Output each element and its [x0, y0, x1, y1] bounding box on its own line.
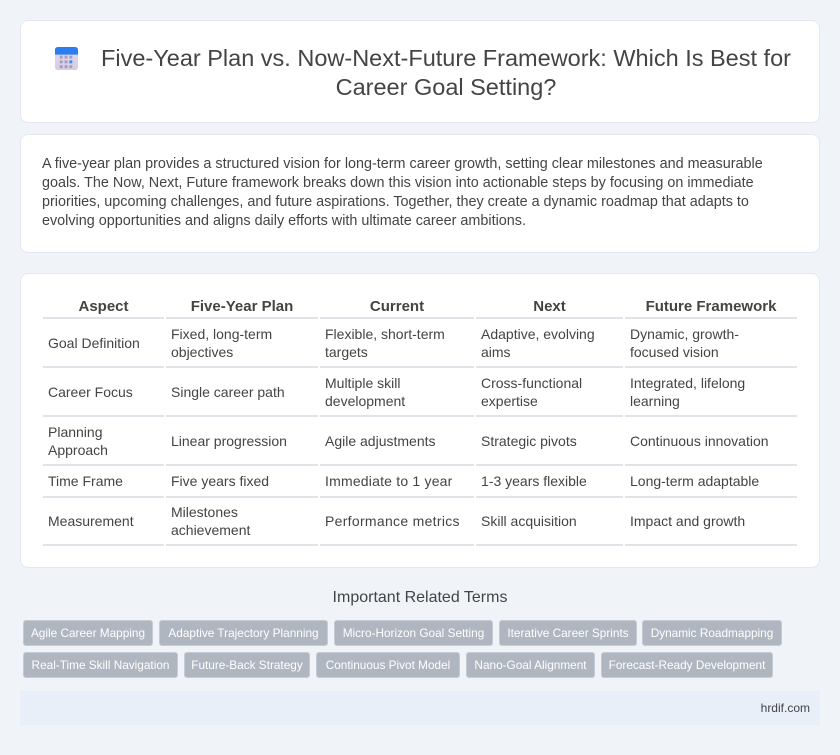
comparison table: 1-3 years flexible: [481, 472, 587, 488]
comparison table: targets: [325, 344, 368, 360]
comparison table: Goal Definition: [48, 334, 140, 350]
comparison table: Planning: [48, 424, 102, 440]
tag group: related terms: Real-Time Skill Navigation: [32, 658, 169, 672]
comparison table: Multiple skill: [325, 374, 400, 390]
comparison table: Career Focus: [48, 384, 133, 400]
heading: related terms: Important Related Terms: [333, 589, 507, 606]
tag group: related terms: Nano-Goal Alignment: [474, 658, 587, 672]
panel: introduction: [20, 134, 820, 253]
comparison table: Long-term adaptable: [630, 472, 759, 488]
title: Career Goal Setting?: [336, 74, 556, 100]
comparison table: expertise: [481, 392, 538, 408]
tag group: related terms: Adaptive Trajectory Planning: [168, 626, 319, 640]
footer source: hrdif.com: [761, 701, 810, 715]
tag group: related terms: Continuous Pivot Model: [326, 658, 450, 672]
comparison table: Milestones: [171, 504, 238, 520]
comparison table: focused vision: [630, 344, 719, 360]
intro text: A five-year plan provides a structured vision for long-term career growth, setting clear milestones and measurable: [42, 156, 763, 172]
intro text: priorities, upcoming challenges, and future aspirations. Together, they create a dynamic roadmap that adapts to: [42, 194, 749, 210]
title: [101, 45, 791, 100]
comparison table: learning: [630, 392, 680, 408]
comparison table: Continuous innovation: [630, 432, 769, 448]
intro text: evolving opportunities and aligns daily efforts with ultimate career ambitions.: [42, 213, 526, 229]
comparison table: [43, 298, 797, 546]
tag group: related terms: Iterative Career Sprints: [507, 626, 629, 640]
comparison table: Five-Year Plan: [191, 298, 293, 315]
comparison table: Cross-functional: [481, 374, 582, 390]
icon: calendar: [54, 47, 78, 70]
title: Five-Year Plan vs. Now-Next-Future Framework: Which Is Best for: [101, 45, 791, 71]
comparison table: Next: [533, 298, 566, 315]
comparison table: Current: [370, 298, 424, 315]
comparison table: Future Framework: [646, 298, 776, 315]
panel: comparison table: [20, 273, 820, 568]
comparison table: Measurement: [48, 512, 134, 528]
comparison table: Dynamic, growth-: [630, 326, 739, 342]
comparison table: Adaptive, evolving: [481, 326, 595, 342]
tag group: related terms: Dynamic Roadmapping: [651, 626, 773, 640]
comparison table: Approach: [48, 442, 108, 458]
comparison table: aims: [481, 344, 511, 360]
tag group: related terms: Agile Career Mapping: [31, 626, 145, 640]
comparison table: Time Frame: [48, 472, 123, 488]
panel: title card: [20, 20, 820, 123]
intro text: goals. The Now, Next, Future framework breaks down this vision into actionable steps by focusing on immediate: [42, 175, 754, 191]
comparison table: achievement: [171, 522, 250, 538]
comparison table: Aspect: [78, 298, 129, 315]
comparison table: Strategic pivots: [481, 432, 577, 448]
tag group: related terms: Forecast-Ready Development: [609, 658, 765, 672]
tag group: related terms: [23, 620, 782, 678]
comparison table: development: [325, 392, 405, 408]
comparison table: Performance metrics: [325, 512, 460, 528]
footer bar: [20, 691, 820, 725]
intro text: [42, 156, 763, 229]
comparison table: objectives: [171, 344, 233, 360]
comparison table: Five years fixed: [171, 472, 269, 488]
comparison table: Impact and growth: [630, 512, 745, 528]
tag group: related terms: Micro-Horizon Goal Setting: [343, 626, 484, 640]
comparison table: Agile adjustments: [325, 432, 436, 448]
comparison table: Integrated, lifelong: [630, 374, 745, 390]
comparison table: Fixed, long-term: [171, 326, 272, 342]
comparison table: Immediate to 1 year: [325, 472, 453, 488]
tag group: related terms: Future-Back Strategy: [191, 658, 303, 672]
comparison table: Linear progression: [171, 432, 287, 448]
comparison table: Skill acquisition: [481, 512, 577, 528]
comparison table: Flexible, short-term: [325, 326, 445, 342]
comparison table: Single career path: [171, 384, 285, 400]
